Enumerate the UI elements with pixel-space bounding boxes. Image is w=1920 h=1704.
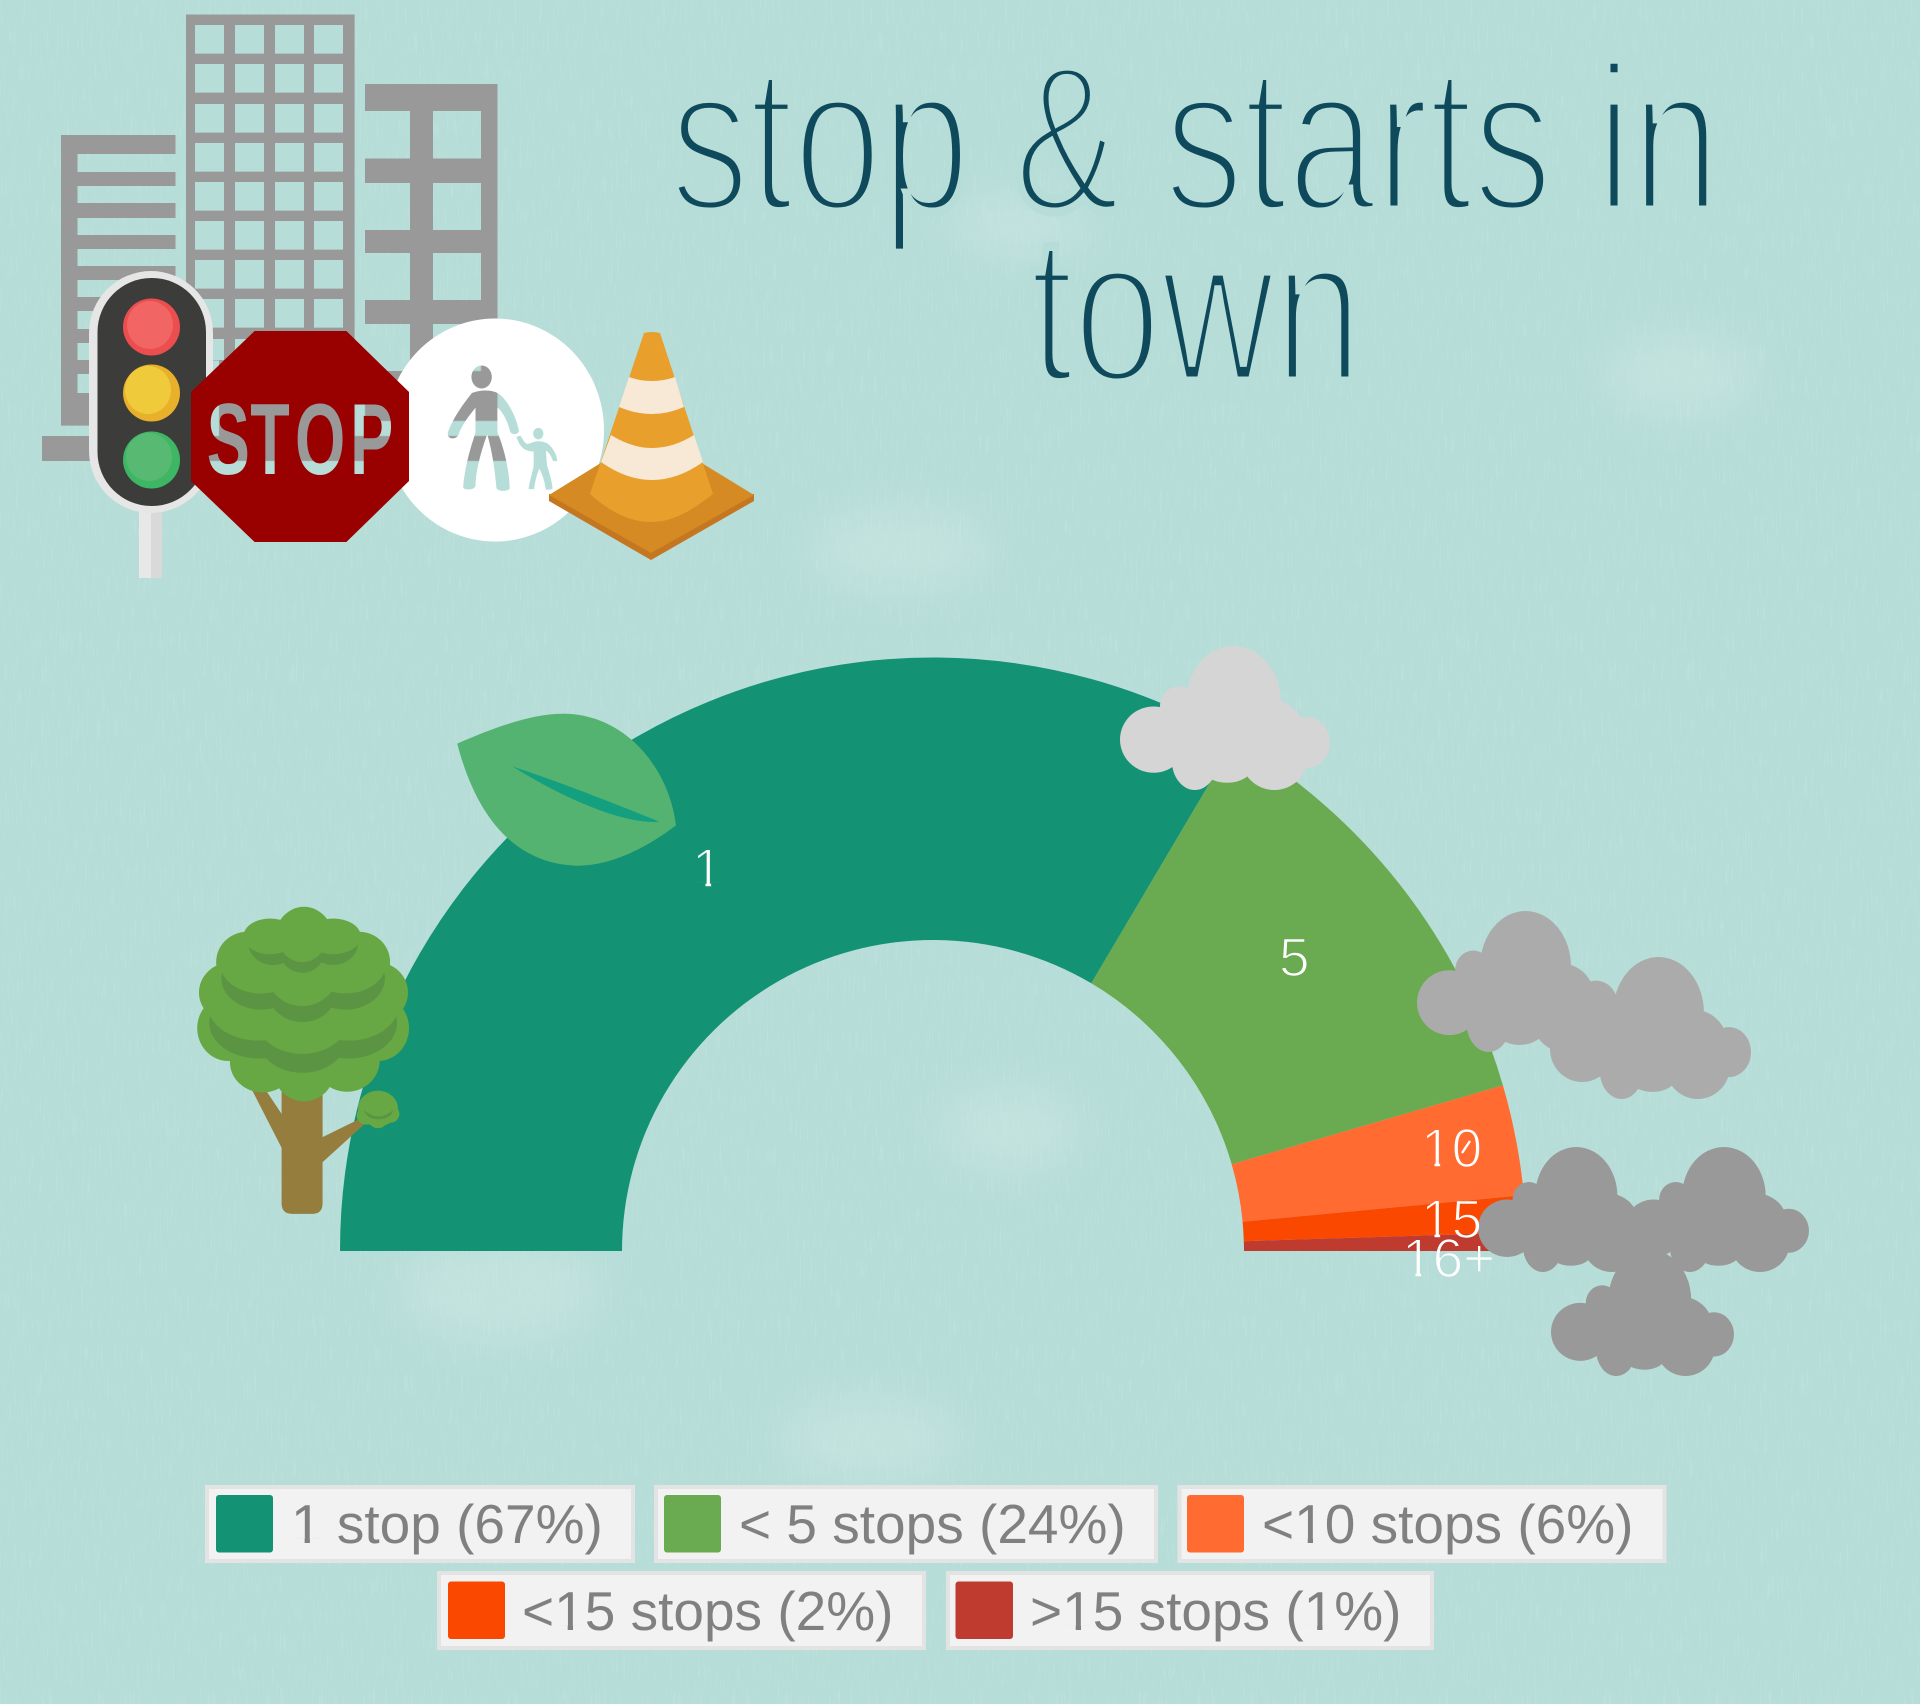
segment: 1 stop <box>340 657 1235 1251</box>
segment: under 15 stops <box>1243 1195 1526 1241</box>
legend item: under 15 stops: <15 stops (2%) <box>522 1580 893 1642</box>
title: town <box>1030 194 1362 426</box>
icon: leaf <box>457 714 676 866</box>
label: 15: 15 <box>1421 1188 1482 1250</box>
title <box>670 23 1720 426</box>
donut chart: stops distribution <box>340 657 1526 1251</box>
segment: over 15 stops <box>1244 1232 1526 1251</box>
chart value labels <box>692 837 1495 1289</box>
legend item: over 15 stops <box>948 1573 1432 1648</box>
label: 16+: 16+ <box>1402 1227 1495 1289</box>
city base <box>42 436 510 461</box>
segment: under 10 stops <box>1232 1085 1524 1222</box>
icon: pedestrian crossing sign <box>386 318 604 542</box>
legend item: 1 stop: 1 stop (67%) <box>291 1493 603 1555</box>
icon: tree <box>197 907 409 1214</box>
segment: under 5 stops <box>1091 740 1503 1164</box>
clouds: mid grey cloud pair <box>1417 911 1751 1099</box>
left building <box>61 135 176 426</box>
label: 5: 5 <box>1279 926 1310 988</box>
legend <box>207 1487 1664 1648</box>
right building <box>365 84 498 421</box>
cloud: light cloud on the chart <box>1120 646 1330 790</box>
legend item: under 10 stops: <10 stops (6%) <box>1262 1493 1633 1555</box>
legend item: under 5 stops: < 5 stops (24%) <box>739 1493 1126 1555</box>
legend item: under 10 stops <box>1180 1487 1664 1561</box>
icon: traffic light <box>89 271 213 578</box>
legend item: under 5 stops <box>656 1487 1156 1561</box>
icon: stop sign: STOP <box>207 382 393 495</box>
clouds: dark grey cloud group <box>1478 1147 1809 1376</box>
label: 1: 1 <box>692 837 723 899</box>
middle building <box>186 14 355 440</box>
icon: city buildings <box>42 14 510 461</box>
legend item: 1 stop <box>207 1487 633 1561</box>
icon: traffic cone <box>549 332 754 560</box>
small bush <box>357 1091 399 1128</box>
label: 10: 10 <box>1421 1117 1482 1179</box>
legend item: under 15 stops <box>439 1573 924 1648</box>
icon: stop sign <box>191 331 409 542</box>
label: 10 <box>1426 1129 1480 1167</box>
legend item: over 15 stops: >15 stops (1%) <box>1030 1580 1401 1642</box>
